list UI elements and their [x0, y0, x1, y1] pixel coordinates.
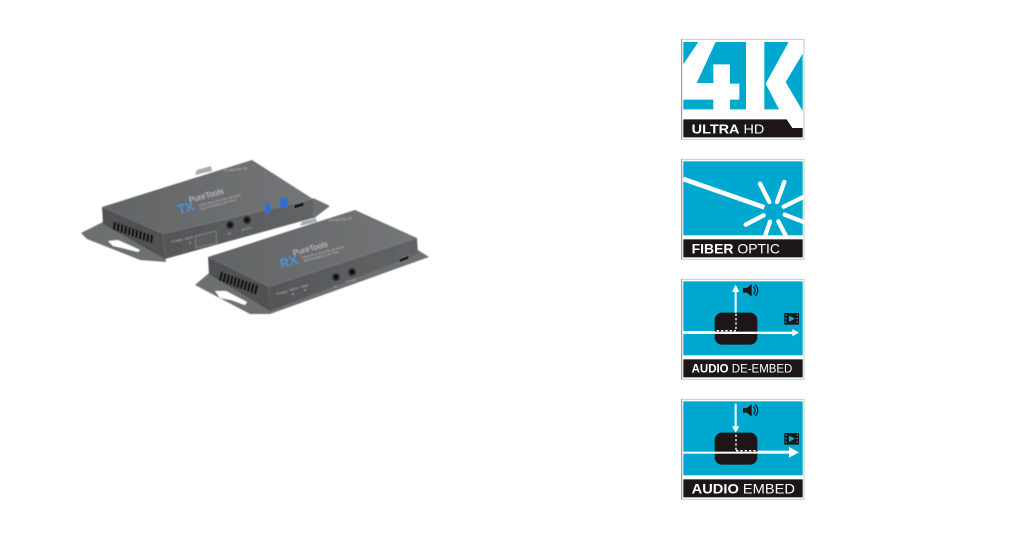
- icon: speaker: [743, 404, 758, 417]
- RX top labels: RX: [278, 252, 300, 271]
- black caption band: [683, 479, 803, 497]
- TX left face: [102, 207, 165, 259]
- RX mounting flange: [195, 250, 429, 314]
- TX top labels: TX: [176, 198, 196, 217]
- device: RX unit: [195, 210, 429, 314]
- caption text: AUDIO DE-EMBED: [692, 362, 793, 376]
- audio output arrow: [732, 285, 739, 313]
- TX fiber port box: [195, 231, 217, 248]
- TX status LEDs: HDCP: [184, 235, 194, 241]
- RX top face: [208, 210, 417, 287]
- TX audio jacks: IN OUT: [241, 226, 252, 232]
- dashed audio path: [736, 435, 757, 451]
- blue field: [683, 281, 803, 355]
- signal arrow: [683, 447, 799, 458]
- icon: film strip: [784, 433, 799, 445]
- RX status LEDs: HDCP: [289, 286, 299, 292]
- TX top labels: [176, 167, 248, 217]
- TX top labels: PureTools: [188, 187, 225, 205]
- TX top labels: De-Embedding over Fiber: [200, 197, 237, 211]
- badge: 4K Ultra HD: [682, 39, 804, 139]
- TX mounting flange: [81, 222, 166, 262]
- icon: speaker: [743, 284, 758, 297]
- device: TX unit: [81, 160, 330, 262]
- TX USB port: [294, 202, 304, 209]
- RX top labels: De-Embedding over Fiber: [303, 249, 340, 263]
- icon: film strip: [784, 313, 799, 325]
- processor block: [715, 313, 757, 345]
- RX top labels: [278, 216, 353, 271]
- blue field: [683, 401, 803, 475]
- RX audio jacks: SP OUT: [345, 278, 357, 284]
- blue field: [683, 161, 803, 235]
- TX top face: [102, 160, 313, 234]
- RX top labels: PT-HDFOE-RX: [329, 216, 353, 223]
- mounting tab at back of RX: [300, 218, 317, 226]
- RX left face: [208, 257, 270, 311]
- caption text: AUDIO EMBED: [692, 481, 795, 497]
- RX USB port: [399, 255, 409, 263]
- TX top labels: PT-HDFOE-TX: [224, 167, 248, 173]
- RX vents: [220, 272, 257, 294]
- caption text: ULTRA HD: [692, 121, 764, 136]
- mounting tab at back of TX: [195, 166, 212, 175]
- audio input arrow: [732, 404, 739, 433]
- caption text: FIBER OPTIC: [692, 241, 780, 257]
- TX right flange: [313, 198, 330, 219]
- RX top labels: HDMI Fiber Extender 4K Audio: [301, 245, 345, 260]
- RX status LEDs: [276, 283, 309, 298]
- 4K blue cut-out lettering: [683, 42, 803, 111]
- RX audio jacks: IN: [333, 284, 337, 289]
- TX status LEDs: POWER: [171, 237, 184, 244]
- badge: Fiber Optic: [682, 159, 804, 259]
- TX audio jacks: IN: [227, 231, 231, 236]
- TX front face: [163, 199, 313, 259]
- TX vents: [114, 222, 152, 243]
- badge: Audio Embed: [682, 399, 804, 499]
- badge: Audio De-Embed: [682, 279, 804, 379]
- TX status LEDs: [171, 235, 194, 246]
- TX flange slot: [108, 240, 140, 252]
- RX front face: [269, 238, 418, 311]
- light beam and rays: [683, 179, 803, 235]
- signal arrow: [683, 329, 799, 336]
- black caption band: [683, 359, 803, 377]
- TX blue switches: [265, 197, 288, 214]
- black caption band: [683, 239, 803, 257]
- RX status LEDs: POWER: [276, 289, 289, 296]
- processor block: [715, 433, 757, 465]
- dashed audio path: [717, 314, 736, 331]
- black caption band: [683, 119, 803, 137]
- TX audio jacks: [226, 216, 252, 236]
- RX flange slot: [215, 291, 247, 305]
- RX status LEDs: HDMI: [300, 283, 309, 289]
- RX top labels: PureTools: [292, 240, 329, 258]
- RX audio jacks: [332, 268, 357, 289]
- TX top labels: HDMI Fiber Extender 4K Audio: [198, 193, 242, 208]
